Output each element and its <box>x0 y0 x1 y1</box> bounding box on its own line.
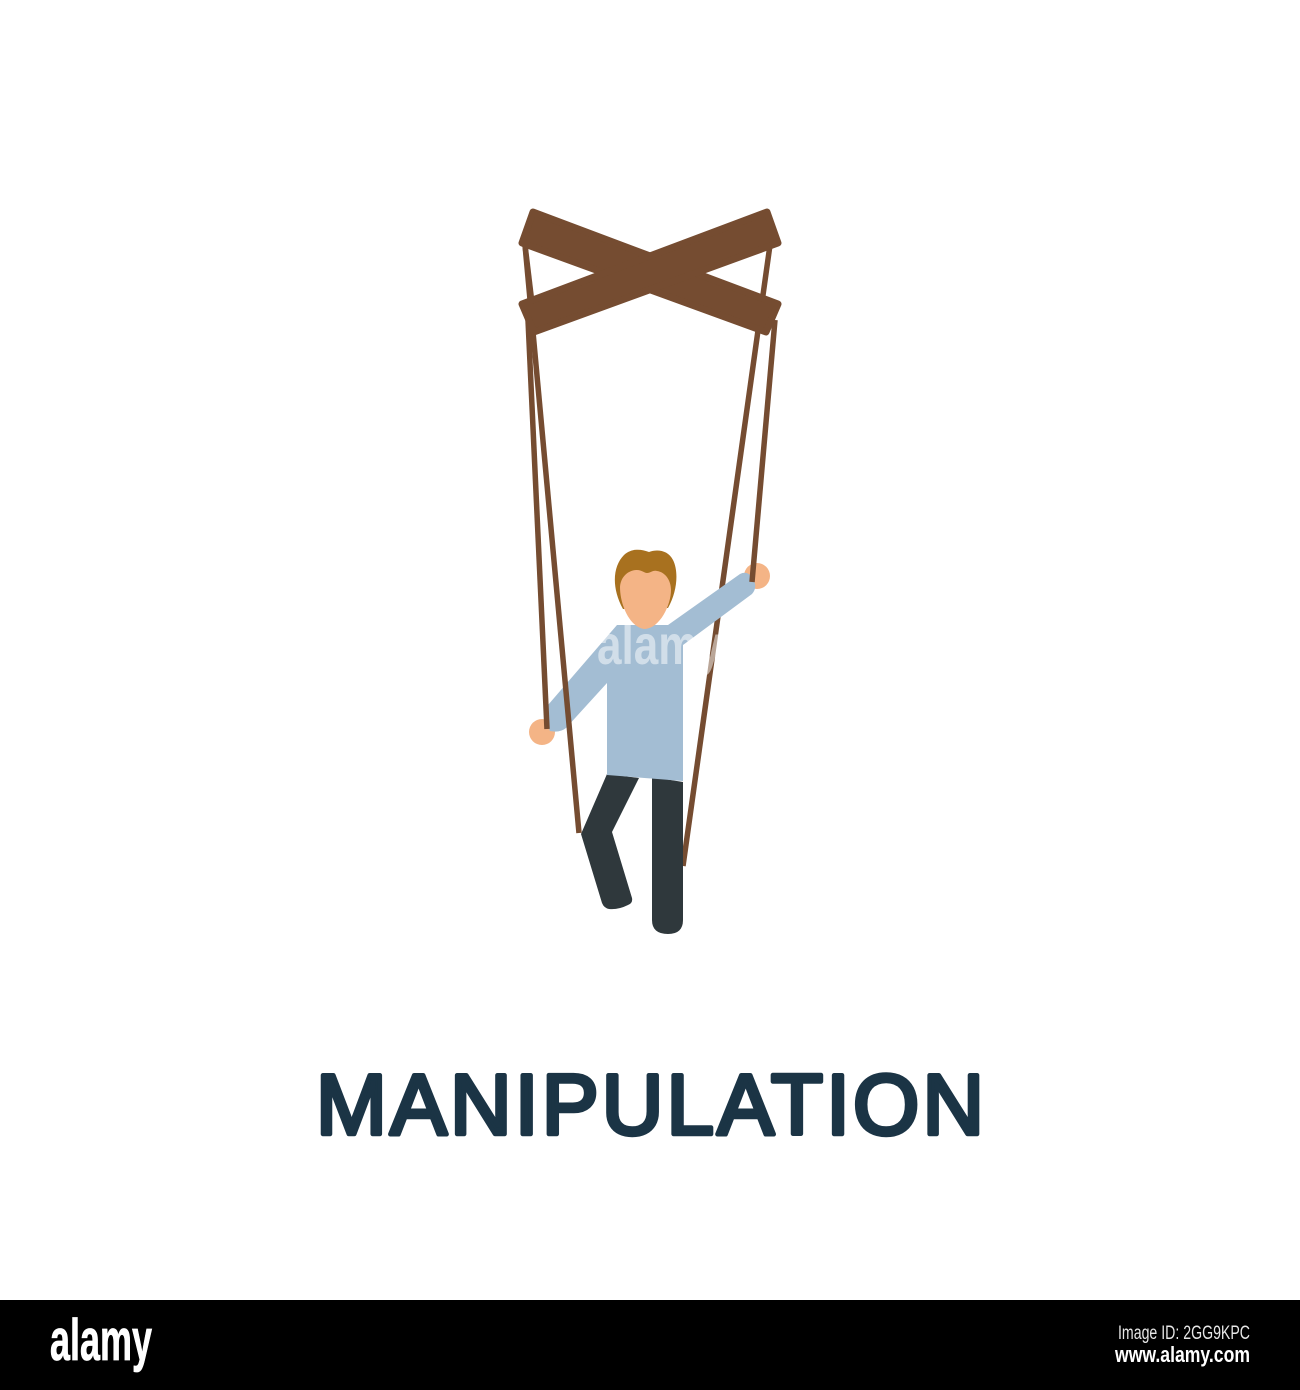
puppet face <box>620 570 671 629</box>
title: MANIPULATION <box>316 1058 984 1153</box>
puppet hands <box>529 563 770 745</box>
icon: marionette puppet <box>522 212 778 934</box>
puppet legs <box>581 774 683 934</box>
image id: Image ID: 2GG9KPC <box>1118 1323 1250 1344</box>
strings behind the figure <box>525 245 770 866</box>
puppet shirt <box>547 573 755 781</box>
footer logo: alamy <box>50 1308 152 1373</box>
watermark on shirt: alamy <box>597 613 722 676</box>
strings in front of the figure <box>525 245 775 833</box>
puppet hair <box>615 550 676 609</box>
crossed wooden control bars <box>522 212 778 332</box>
website: www.alamy.com <box>1114 1342 1250 1367</box>
footer bar <box>0 1300 1300 1390</box>
